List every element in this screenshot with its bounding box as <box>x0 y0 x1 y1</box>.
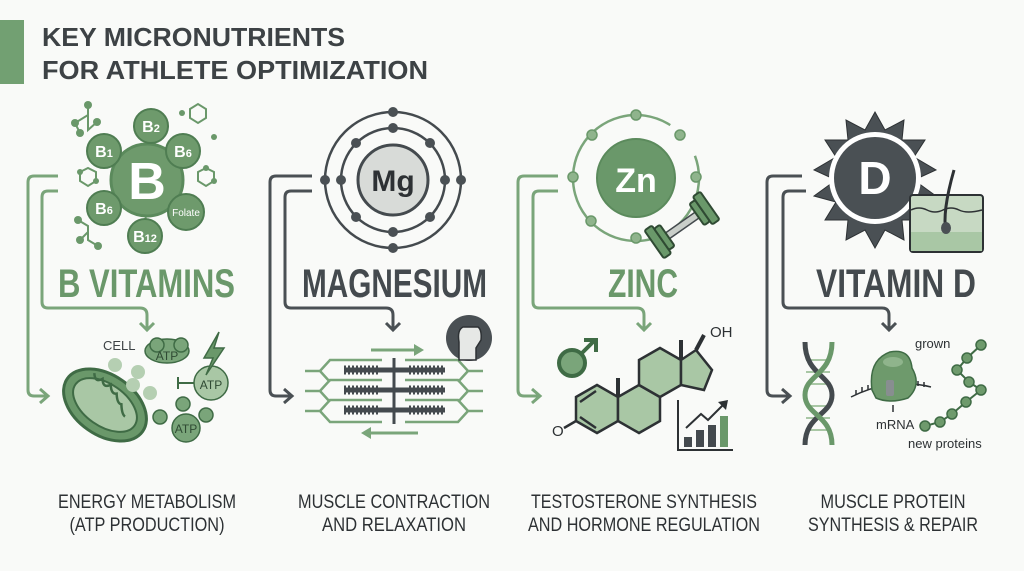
arrow: D connectors <box>767 176 896 403</box>
arrow: B connectors <box>28 176 154 403</box>
icon: B vitamin cluster <box>71 101 217 253</box>
panel: Zinc: O <box>552 423 564 440</box>
icon: protein chain <box>908 340 986 451</box>
panel: Vitamin D <box>767 112 986 536</box>
icon: B vitamin cluster: B6 <box>174 144 192 161</box>
caption: testosterone <box>528 492 760 536</box>
caption: muscle contraction: MUSCLE CONTRACTION <box>298 492 490 513</box>
icon: mitochondria and ATP: ATP <box>200 378 222 392</box>
icon: ribosome and mRNA: grown <box>915 336 950 351</box>
icon: B vitamin cluster: Folate <box>172 208 200 219</box>
caption: muscle contraction <box>298 492 490 536</box>
icon: mitochondria and ATP: ATP <box>156 349 178 363</box>
icon: Mg atom: Mg <box>371 165 415 198</box>
caption: muscle protein <box>808 492 978 536</box>
icon: sarcomere <box>305 344 483 439</box>
icon: Zn atom with dumbbell: Zn <box>615 162 657 200</box>
icon: Mg atom <box>320 107 466 253</box>
icon: male symbol <box>559 340 596 376</box>
icon: ribosome and mRNA: mRNA <box>876 417 915 432</box>
icon: B vitamin cluster: B6 <box>95 201 113 218</box>
icon: DNA helix <box>805 342 832 445</box>
icon: mitochondria and ATP: CELL <box>103 338 136 353</box>
caption: testosterone: AND HORMONE REGULATION <box>528 515 760 536</box>
heading: ZINC: ZINC <box>608 262 678 306</box>
caption: testosterone: TESTOSTERONE SYNTHESIS <box>531 492 757 513</box>
caption: muscle contraction: AND RELAXATION <box>322 515 466 536</box>
arrow: Zn connectors <box>518 176 651 403</box>
icon: sun with D <box>814 112 936 248</box>
icon: mitochondria and ATP <box>50 332 228 456</box>
panel: B vitamins <box>28 101 236 536</box>
panel: Zinc <box>518 92 760 536</box>
title: FOR ATHLETE OPTIMIZATION <box>42 55 428 85</box>
caption: muscle protein: MUSCLE PROTEIN <box>820 492 966 513</box>
heading: MAGNESIUM: MAGNESIUM <box>302 262 487 306</box>
title: KEY MICRONUTRIENTS <box>42 22 345 52</box>
icon: B vitamin cluster: B2 <box>142 119 160 136</box>
caption: muscle protein: SYNTHESIS & REPAIR <box>808 515 978 536</box>
caption: energy metabolism <box>58 492 236 536</box>
icon: fist <box>446 315 492 361</box>
heading: B VITAMINS: B VITAMINS <box>58 262 235 306</box>
panel: Magnesium <box>270 107 492 536</box>
arrow: Mg connectors <box>270 176 400 403</box>
caption: energy metabolism: ENERGY METABOLISM <box>58 492 236 513</box>
icon: protein chain: new proteins <box>908 436 982 451</box>
panel: Zinc: OH <box>710 324 732 341</box>
icon: B vitamin cluster: B1 <box>95 144 113 161</box>
icon: Zn atom with dumbbell <box>550 92 722 264</box>
heading: VITAMIN D: VITAMIN D <box>816 262 976 306</box>
icon: sun with D: D <box>858 152 892 204</box>
icon: growth chart <box>678 400 733 450</box>
icon: skin <box>910 170 983 252</box>
icon: mitochondria and ATP: ATP <box>175 422 197 436</box>
title <box>0 20 428 85</box>
icon: ribosome and mRNA <box>851 336 950 432</box>
icon: testosterone molecule <box>564 335 712 433</box>
caption: energy metabolism: (ATP PRODUCTION) <box>70 515 224 536</box>
icon: B vitamin cluster: B <box>128 153 166 211</box>
icon: B vitamin cluster: B12 <box>133 229 157 246</box>
